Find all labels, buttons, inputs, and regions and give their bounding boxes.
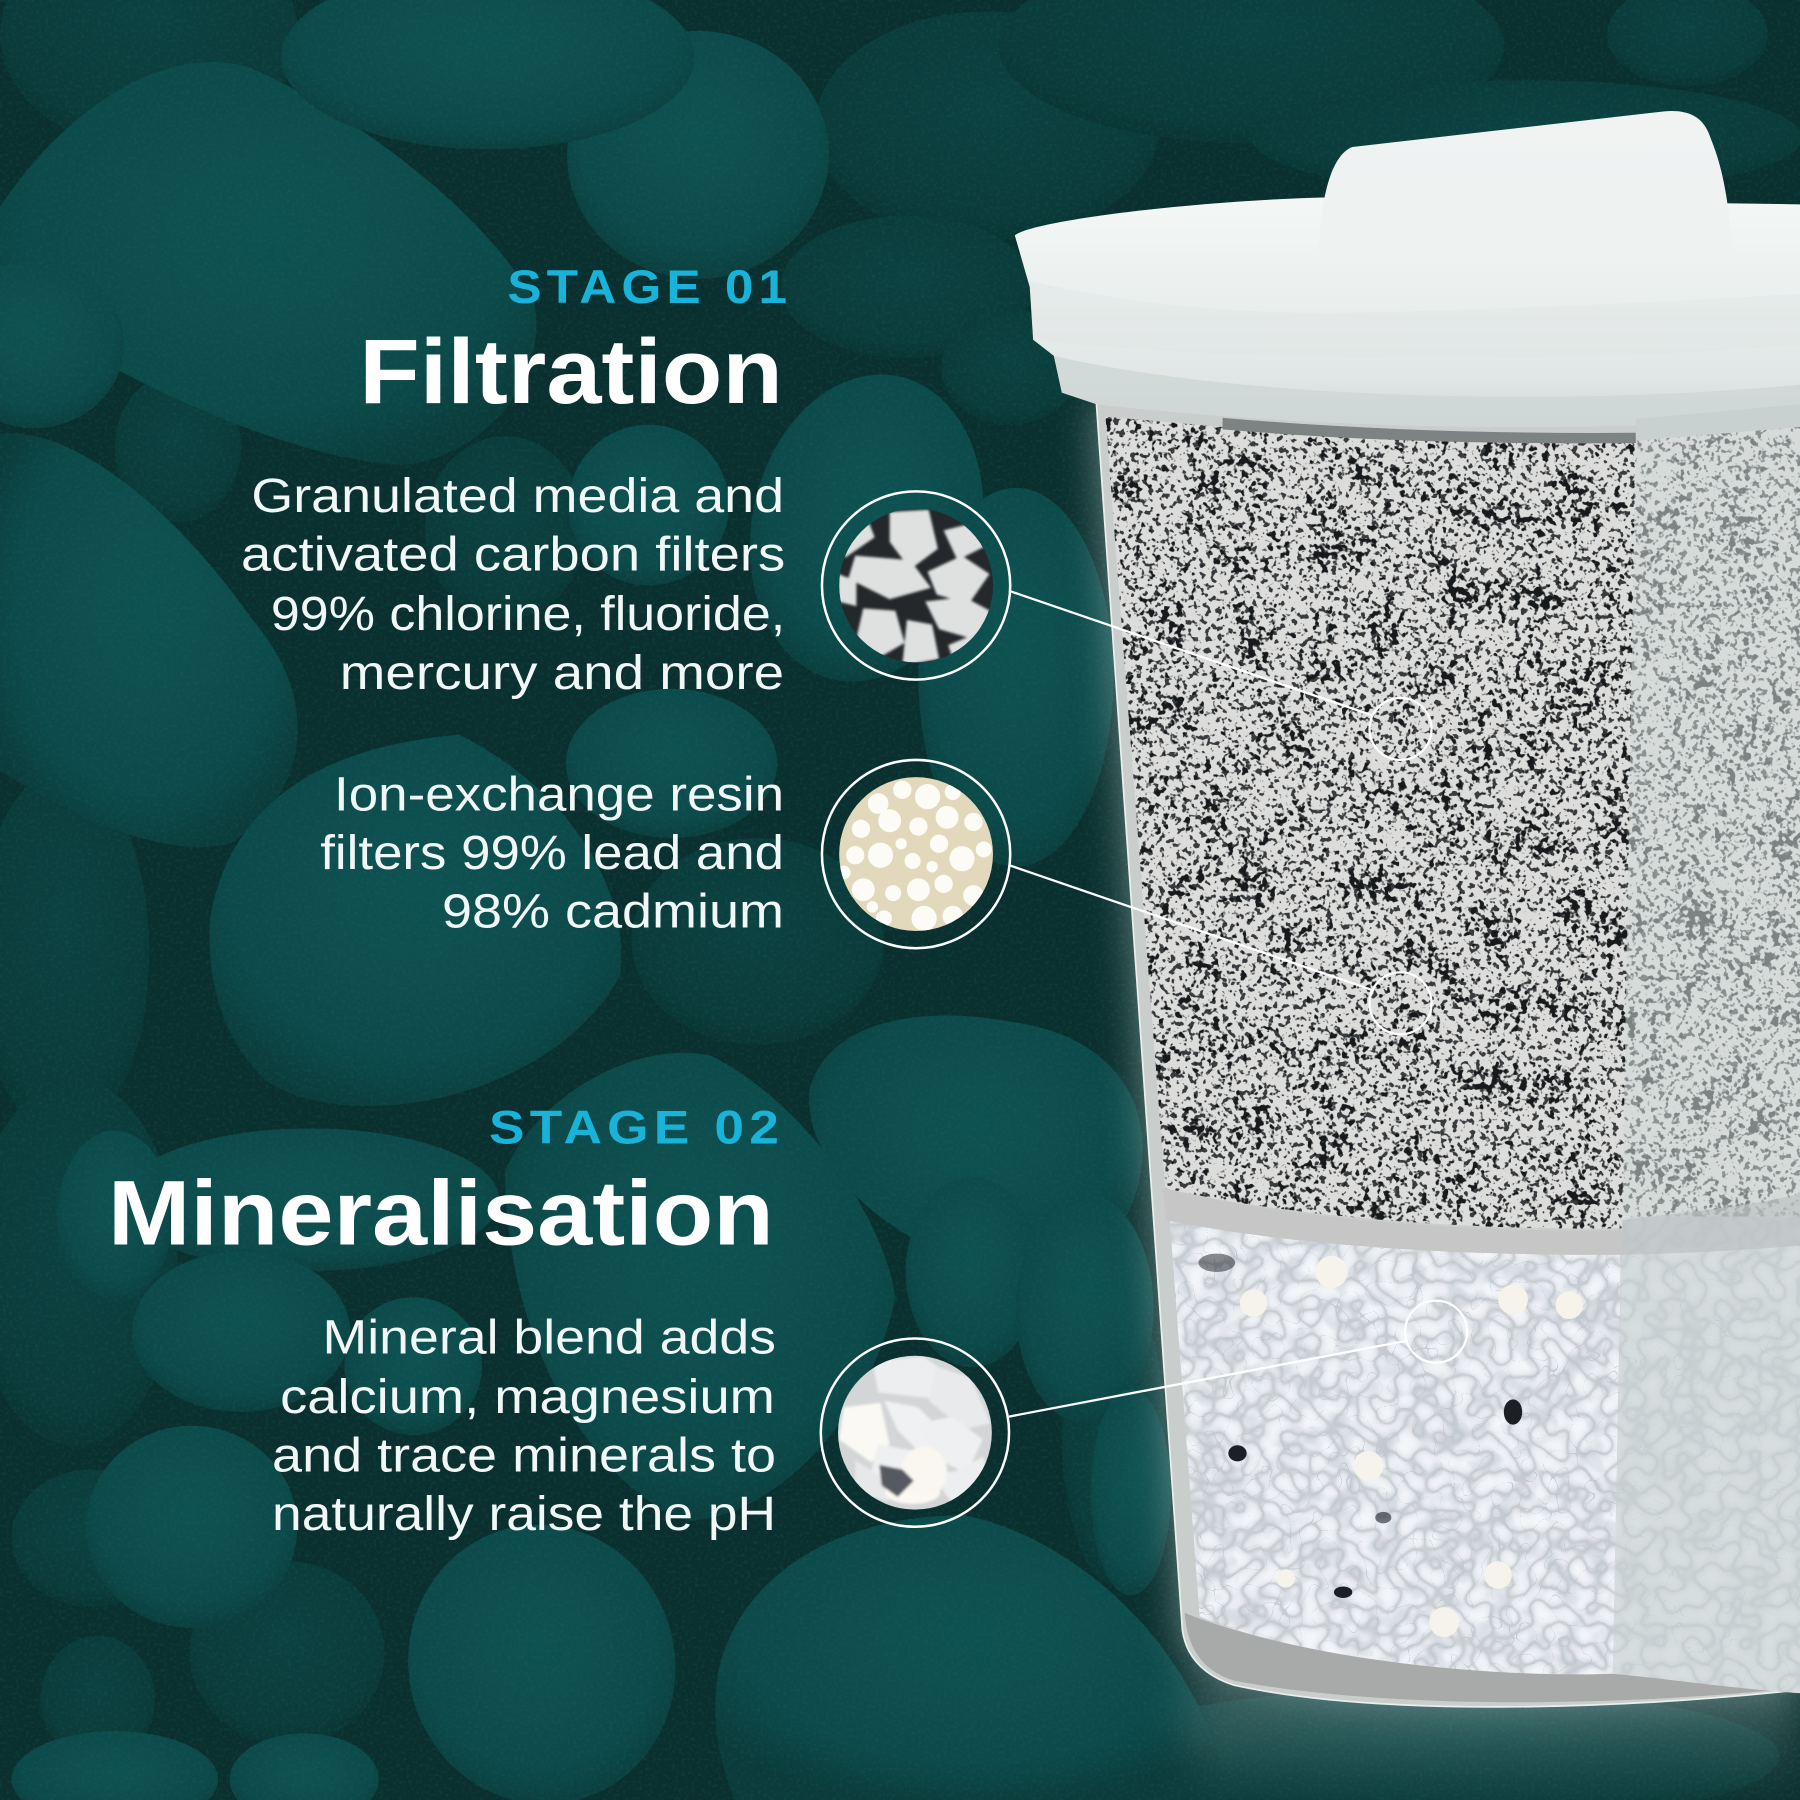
panel: stage 01 text bbox=[241, 260, 792, 939]
heading: filtration: Filtration bbox=[359, 321, 783, 423]
label: stage 02: STAGE 02 bbox=[489, 1100, 784, 1153]
gasket shadow bbox=[1223, 418, 1636, 443]
callout: carbon media sample bbox=[822, 491, 1010, 680]
lid tab bbox=[1318, 111, 1733, 264]
text block: ion-exchange resin bbox=[320, 767, 784, 939]
pointer lines and markers bbox=[1009, 591, 1467, 1417]
text block: mineral blend: Mineral blend adds bbox=[323, 1310, 776, 1364]
base shading bbox=[1185, 1613, 1800, 1702]
marker: resin bbox=[1370, 972, 1432, 1034]
pointer: carbon media bbox=[1010, 591, 1372, 715]
pointer: resin bbox=[1010, 866, 1374, 991]
text block: carbon media: activated carbon filters bbox=[241, 528, 785, 582]
pointer: minerals bbox=[1009, 1341, 1406, 1417]
cartridge lid bbox=[1015, 111, 1800, 443]
chamber: filtration media bbox=[1091, 402, 1653, 1240]
filter cartridge bbox=[1091, 402, 1800, 1707]
lid lower band bbox=[1054, 356, 1800, 427]
label: stage 01: STAGE 01 bbox=[507, 260, 792, 313]
text block: ion-exchange resin: 98% cadmium bbox=[442, 885, 784, 939]
text block: carbon media: mercury and more bbox=[340, 646, 784, 700]
translucent back wall bbox=[1607, 413, 1800, 1699]
text block: carbon media: Granulated media and bbox=[251, 469, 784, 523]
callout: resin sample bbox=[822, 760, 1010, 948]
cartridge glow bbox=[1096, 402, 1800, 1800]
text block: mineral blend: naturally raise the pH bbox=[272, 1487, 776, 1541]
text block: carbon media bbox=[241, 469, 785, 700]
separator band bbox=[1163, 1188, 1623, 1255]
text block: mineral blend bbox=[272, 1310, 776, 1541]
callout: mineral sample bbox=[821, 1339, 1009, 1527]
text block: mineral blend: and trace minerals to bbox=[272, 1429, 776, 1483]
panel: stage 02 text bbox=[108, 1100, 784, 1541]
text block: ion-exchange resin: Ion-exchange resin bbox=[334, 767, 784, 821]
chamber: mineral blend bbox=[1159, 1211, 1630, 1682]
lid inner lip bbox=[1030, 281, 1800, 358]
text block: carbon media: 99% chlorine, fluoride, bbox=[271, 587, 785, 641]
cartridge body bbox=[1096, 402, 1800, 1707]
heading: mineralisation: Mineralisation bbox=[108, 1162, 774, 1264]
marker: carbon media bbox=[1370, 698, 1432, 760]
text block: ion-exchange resin: filters 99% lead and bbox=[320, 826, 784, 880]
marker: minerals bbox=[1405, 1301, 1467, 1363]
text block: mineral blend: calcium, magnesium bbox=[280, 1370, 775, 1424]
